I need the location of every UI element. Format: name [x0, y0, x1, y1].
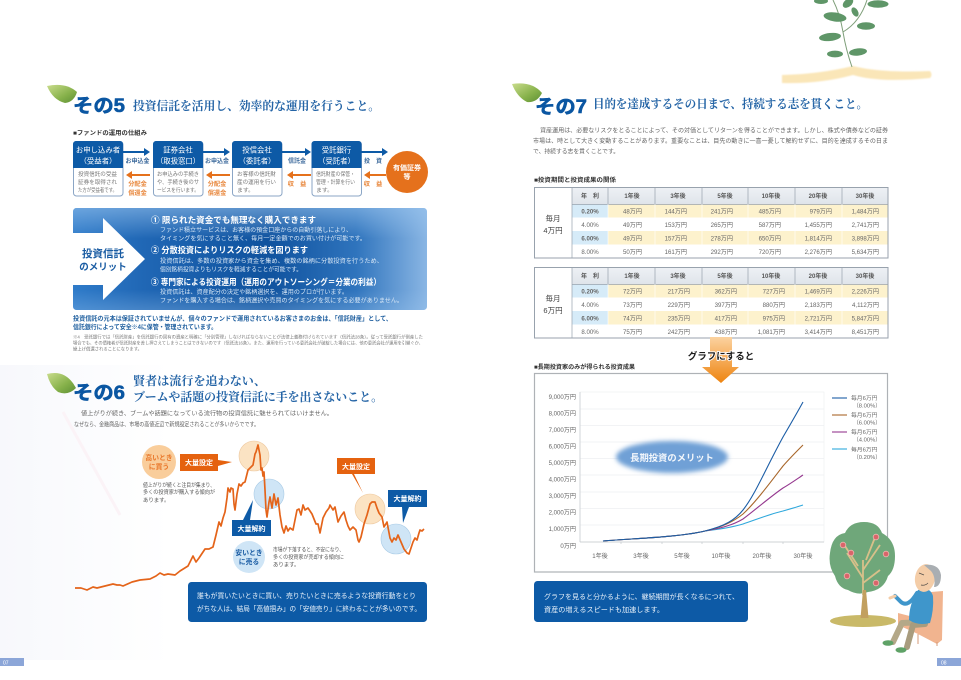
legend: 毎月6万円 [851, 446, 878, 454]
illustration: seedling plant [782, 0, 932, 83]
table: monthly 40,000 yen: 0.20% [581, 208, 599, 216]
x axis labels [592, 552, 812, 560]
arrow labels: 分配金 [128, 180, 148, 188]
text: rising market: 値上がりが続くと注目が集まり、 [143, 481, 215, 489]
arrow: merit label: のメリット [79, 262, 127, 273]
table: monthly 60,000 yen: 6.00% [581, 316, 599, 322]
table: monthly 60,000 yen: 5年後 [717, 272, 733, 280]
table: monthly 60,000 yen: 75万円 [623, 329, 642, 336]
heading: その6: 賢者は流行を追わない、 [133, 373, 266, 388]
orange price line [75, 445, 424, 590]
tag: large issuance left: 大量設定 [185, 458, 213, 467]
merit 2: ② 分散投資によりリスクの軽減を図ります [151, 244, 308, 255]
arrow: to graph: グラフにすると [688, 350, 754, 362]
x axis labels: 20年後 [753, 552, 771, 560]
arrow labels: 収 益 [288, 180, 307, 188]
merit 3: ファンドを購入する場合は、銘柄選択や売買のタイミングを気にする必要がありません。 [160, 296, 403, 304]
table: monthly 40,000 yen: 30年後 [856, 192, 874, 200]
table: monthly 60,000 yen: 362万円 [715, 288, 737, 296]
text: section 6 intro [74, 410, 333, 428]
table: monthly 60,000 yen: 毎月 [546, 293, 560, 303]
y axis labels: 8,000万円 [549, 410, 576, 418]
text: section 7 intro: で、持続する志を貫くことです。 [533, 148, 619, 156]
heading: その5: その5 [73, 96, 125, 117]
table: monthly 40,000 yen: 6.00% [581, 236, 599, 242]
table: monthly 60,000 yen: 217万円 [668, 288, 690, 296]
callout: high buying low selling: 誰もが買いたいときに買い、売りたいときに売るような投資行動をとり [197, 591, 416, 600]
heading: その7: 目的を達成するその日まで、持続する志を貫くこと。 [593, 96, 868, 111]
y axis labels: 6,000万円 [549, 444, 576, 450]
box: investment trust company: （委託者） [239, 156, 275, 166]
callout: buy when high: に買う [149, 462, 169, 471]
table: monthly 40,000 yen: 485万円 [759, 208, 781, 216]
table: monthly 40,000 yen: 161万円 [665, 249, 687, 256]
table: monthly 40,000 yen: 241万円 [711, 208, 733, 216]
box: applicant: 投資信託の受益 [78, 170, 118, 178]
legend: （6.00%） [853, 420, 881, 426]
table: monthly 40,000 yen: 48万円 [623, 208, 642, 216]
text: falling market: あります。 [273, 562, 299, 568]
tag: large issuance right [337, 458, 375, 493]
arrow labels [125, 157, 383, 197]
text: rising market: 多くの投資家が購入する傾向が [143, 488, 216, 496]
table: monthly 40,000 yen: 2,276万円 [805, 249, 832, 256]
callout: sell when low: に売る [239, 557, 259, 566]
table: monthly 40,000 yen: 5年後 [717, 192, 733, 200]
table: monthly 60,000 yen: 74万円 [623, 316, 642, 322]
heading: その7 [512, 83, 868, 118]
table: monthly 60,000 yen: 0.20% [581, 288, 599, 296]
legend: 毎月6万円 [851, 411, 878, 419]
merit 3: 投資信託は、資産配分の決定や銘柄選択を、運用のプロが行います。 [160, 288, 348, 296]
box: trust bank: 管理・計算を行い [316, 178, 355, 186]
table: monthly 40,000 yen [534, 187, 888, 258]
merit 2: 投資信託は、多数の投資家から資金を集め、複数の銘柄に分散投資を行うため、 [160, 257, 383, 265]
text: rising market: あります。 [143, 497, 169, 504]
table: monthly 60,000 yen: 8.00% [581, 329, 599, 336]
heading: その5 [47, 85, 380, 117]
box: securities company [153, 141, 203, 196]
curve: 8.00% [603, 402, 803, 541]
box: applicant: お申し込み者 [76, 146, 120, 154]
table: monthly 60,000 yen: 2,226万円 [852, 288, 879, 296]
footnote [73, 334, 423, 352]
footnote: 場合でも、その債権者が信託財産を差し押さえてしまうことはできないのです（信託法16条）。また、運用を行っている委託会社が破綻した場合には、他の委託会社が運用を引継ぐか、 [73, 340, 423, 346]
text: trust property note: 投資信託の元本は保証されていませんが、個々のファンドで運用されているお客さまのお金は、「信託財産」として、 [73, 314, 392, 322]
arrows: investment flow [123, 148, 388, 156]
table: monthly 60,000 yen: 880万円 [763, 302, 785, 309]
chart: price line with callouts [75, 441, 427, 590]
table: monthly 60,000 yen: 975万円 [763, 316, 785, 322]
table: monthly 40,000 yen: 1,455万円 [805, 222, 832, 229]
arrow: merit label [73, 218, 145, 300]
y axis labels: 7,000万円 [549, 427, 576, 434]
arrow labels: 収 益 [364, 180, 383, 188]
callout: buy when high: 高いとき [145, 453, 173, 462]
table: monthly 40,000 yen: 292万円 [711, 249, 733, 256]
table: monthly 60,000 yen: 5,847万円 [852, 316, 879, 322]
box: applicant [73, 141, 123, 196]
callout: chart conclusion: グラフを見ると分かるように、継続期間が長くなるにつれて、 [544, 592, 739, 601]
table: monthly 60,000 yen: 72万円 [623, 288, 642, 296]
merit 3 [151, 276, 403, 304]
arrows: return flow [126, 171, 386, 179]
box: securities company: 証券会社 [163, 146, 193, 154]
table: monthly 60,000 yen: 727万円 [763, 288, 785, 296]
text: section 7 intro: 市場は、時として大きく変動することがあります。重要なことは、目先の動きに一喜一憂して解約せずに、目的を達成するその日ま [533, 137, 888, 145]
table: monthly 40,000 yen: 157万円 [665, 236, 687, 242]
table: monthly 60,000 yen: 73万円 [623, 302, 642, 309]
table: monthly 40,000 yen: 1,814万円 [805, 236, 832, 242]
y axis labels: 3,000万円 [549, 493, 576, 500]
y axis labels: 9,000万円 [549, 394, 576, 401]
table: monthly 40,000 yen: 3年後 [670, 192, 686, 200]
table: monthly 60,000 yen: 4.00% [581, 302, 599, 309]
illustration: apple tree [830, 522, 896, 627]
table: monthly 60,000 yen: 1,081万円 [758, 329, 785, 336]
table: monthly 40,000 yen: 毎月 [546, 213, 560, 223]
arrow labels: 分配金 [208, 180, 227, 188]
illustration: elderly man in chair [882, 562, 943, 653]
y axis labels: 1,000万円 [549, 526, 576, 533]
merit 1: タイミングを気にすること無く、毎月一定金額でのお買い付けが可能です。 [160, 234, 366, 242]
curve: 4.00% [603, 475, 803, 541]
y axis labels: 0万円 [560, 543, 576, 550]
legend: 毎月6万円 [851, 394, 878, 402]
merit 2: 個別銘柄投資よりもリスクを軽減することが可能です。 [160, 266, 302, 274]
box: applicant: （受益者） [80, 156, 116, 166]
table: monthly 60,000 yen: 3,414万円 [805, 329, 832, 336]
text: trust property note [73, 314, 392, 331]
circle: securities [386, 151, 428, 193]
callout: chart conclusion: 資産の増えるスピードも加速します。 [544, 605, 664, 614]
table: monthly 60,000 yen: 30年後 [856, 272, 874, 280]
table: monthly 60,000 yen: 397万円 [715, 302, 737, 309]
table: monthly 40,000 yen: 10年後 [762, 192, 780, 200]
panel: line chart [534, 374, 888, 572]
table: monthly 40,000 yen: 3,898万円 [852, 236, 879, 242]
table: monthly 40,000 yen: 144万円 [665, 208, 687, 216]
arrow: merit label: 投資信託 [82, 247, 124, 260]
box: investment trust company: 投信会社 [242, 146, 272, 154]
callout: high buying low selling: がちな人は、結局「高値掴み」の「安値売り」に終わることが多いのです。 [197, 604, 421, 613]
text: section 6 intro: なぜなら、金融商品は、市場の高値近辺で新規設定されることが多いからでです。 [74, 420, 259, 428]
box: trust bank [312, 141, 362, 196]
text: falling market: 多くの投資家が売却する傾向に [273, 553, 344, 561]
table: monthly 60,000 yen: 242万円 [668, 329, 690, 336]
box: trust bank: ます。 [316, 187, 333, 194]
table: monthly 60,000 yen: 8,451万円 [852, 329, 879, 336]
box: securities company: お申込みの手続き [157, 170, 199, 178]
table: monthly 40,000 yen: 1年後 [624, 192, 640, 200]
table: monthly 60,000 yen [534, 267, 888, 338]
table: monthly 40,000 yen: 720万円 [759, 249, 781, 256]
badge: long-term merit [616, 441, 728, 473]
tag: large issuance right: 大量設定 [342, 462, 370, 471]
table: monthly 40,000 yen: 49万円 [623, 222, 642, 229]
table: monthly 60,000 yen: 417万円 [715, 316, 737, 322]
text: trust property note: 信託銀行によって安全※4に保管・管理されています。 [73, 322, 217, 331]
label: period and result: ■投資期間と投資成果の関係 [534, 176, 616, 184]
table: monthly 60,000 yen: 6万円 [543, 306, 563, 315]
box: investment trust company: 産の運用を行い [237, 178, 276, 186]
box: investment trust company [232, 141, 282, 196]
page background tint [0, 365, 170, 660]
highlight circles [239, 441, 411, 554]
table: monthly 60,000 yen: 229万円 [668, 302, 690, 309]
footnote: ※4 受託銀行では「信託財産」を信託銀行の固有の資産と明確に「分別管理」しなければならないことが法律上義務付けられています（信託法28条）。従って受託銀行が倒産した [73, 334, 423, 340]
table: monthly 40,000 yen: 979万円 [810, 208, 832, 216]
footnote: 繰上げ償還されることになります。 [73, 346, 142, 352]
x axis labels: 30年後 [794, 552, 812, 560]
table: monthly 40,000 yen: 5,634万円 [852, 249, 879, 256]
merit 1: ① 限られた資金でも無理なく購入できます [151, 214, 316, 225]
table: monthly 40,000 yen: 2,741万円 [852, 222, 879, 229]
tag: large redemption left: 大量解約 [238, 524, 266, 533]
table: monthly 60,000 yen: 10年後 [762, 272, 780, 280]
arrow labels: お申込金 [205, 157, 229, 165]
page number 07: 07 [3, 660, 9, 666]
x axis labels: 3年後 [633, 552, 649, 560]
arrow labels: 投 資 [364, 157, 382, 165]
table: monthly 40,000 yen: 4.00% [581, 222, 599, 229]
table: monthly 60,000 yen: 4,112万円 [852, 302, 879, 309]
table: monthly 60,000 yen: 438万円 [715, 329, 737, 336]
table: monthly 40,000 yen: 587万円 [759, 222, 781, 229]
box: securities company: （取扱窓口） [156, 156, 200, 166]
heading: その6 [47, 373, 383, 404]
y axis labels: 2,000万円 [549, 510, 576, 516]
box: applicant: た方が受益者です。 [78, 186, 117, 194]
box: investment trust company: お客様の信託財 [237, 170, 277, 178]
legend [832, 394, 881, 461]
arrow labels: 償還金 [128, 189, 148, 197]
heading: その7: その7 [535, 97, 587, 118]
heading: その6: ブームや話題の投資信託に手を出さないこと。 [133, 389, 383, 404]
table: monthly 40,000 yen: 8.00% [581, 249, 599, 256]
callout: sell when low: 安いとき [235, 548, 263, 557]
legend: （8.00%） [853, 402, 881, 410]
circle: securities: 等 [404, 172, 410, 181]
box: trust bank: （受託者） [318, 156, 355, 166]
merit 1 [151, 214, 366, 242]
page number 08: 08 [941, 660, 947, 666]
merit 3: ③ 専門家による投資運用（運用のアウトソーシング＝分業の利益） [151, 276, 381, 287]
box: trust bank: 信託財産の保管・ [316, 170, 355, 178]
table: monthly 60,000 yen: 20年後 [809, 272, 827, 280]
arrow labels: 償還金 [208, 189, 227, 197]
merit 2 [151, 244, 383, 274]
label: fund mechanism: ■ファンドの運用の仕組み [73, 129, 147, 137]
arrow labels: 信託金 [288, 157, 306, 165]
tag: large redemption right [388, 490, 427, 523]
table: monthly 40,000 yen: 20年後 [809, 192, 827, 200]
callout: sell when low [233, 541, 265, 573]
arrow: to graph [688, 337, 754, 383]
table: monthly 40,000 yen: 278万円 [711, 236, 733, 242]
callout: chart conclusion [534, 581, 748, 622]
table: monthly 60,000 yen: 年 利 [581, 272, 599, 280]
table: monthly 40,000 yen: 1,484万円 [852, 208, 879, 216]
box: applicant: 証券を取得され [78, 178, 118, 186]
circle: securities: 有価証券 [393, 163, 421, 172]
text: falling market [273, 546, 344, 568]
text: rising market [143, 481, 216, 504]
table: monthly 40,000 yen: 年 利 [581, 192, 599, 200]
legend: （0.20%） [853, 454, 881, 461]
arrow labels: お申込金 [125, 157, 150, 165]
y axis labels: 4,000万円 [549, 476, 576, 484]
table: monthly 40,000 yen: 650万円 [759, 236, 781, 242]
page number 07 [0, 658, 24, 666]
table: monthly 40,000 yen: 50万円 [623, 249, 642, 256]
text: section 6 intro: 値上がりが続き、ブームや話題になっている流行物の投資信託に魅せられてはいけません。 [81, 410, 333, 418]
text: section 7 intro: 資産運用は、必要なリスクをとることによって、その対価としてリターンを得ることができます。しかし、株式や債券などの証券 [540, 126, 888, 134]
legend: （4.00%） [853, 436, 881, 444]
heading: その6: その6 [73, 383, 125, 404]
y axis labels [549, 394, 576, 550]
badge: long-term merit: 長期投資のメリット [630, 452, 714, 463]
table: monthly 60,000 yen: 1年後 [624, 272, 640, 280]
curve: 6.00% [603, 445, 803, 541]
y axis labels: 5,000万円 [549, 460, 576, 467]
x axis labels: 10年後 [712, 552, 730, 560]
label: long-term results: ■長期投資家のみが得られる投資成果 [534, 363, 635, 371]
heading: その5: 投資信託を活用し、効率的な運用を行うこと。 [133, 98, 380, 113]
x axis labels: 1年後 [592, 552, 608, 560]
legend: 毎月6万円 [851, 428, 878, 436]
x axis labels: 5年後 [674, 552, 690, 560]
table: monthly 40,000 yen: 153万円 [665, 222, 687, 229]
curve: 0.20% [603, 505, 803, 541]
page number 08 [937, 658, 961, 666]
tag: large redemption right: 大量解約 [394, 494, 422, 503]
table: monthly 60,000 yen: 3年後 [670, 272, 686, 280]
table: monthly 60,000 yen: 1,469万円 [805, 288, 832, 296]
tag: large issuance left [180, 454, 232, 471]
table: monthly 60,000 yen: 235万円 [668, 316, 690, 322]
tag: large redemption left [232, 500, 271, 536]
box: securities company: や、手続き後のサ [157, 178, 199, 186]
text: section 7 intro [533, 126, 888, 156]
box: investment trust company: ます。 [237, 187, 254, 194]
box: securities company: ービスを行います。 [157, 186, 199, 194]
table: monthly 40,000 yen: 265万円 [711, 222, 733, 229]
table: monthly 60,000 yen: 2,183万円 [805, 302, 832, 309]
merit 1: ファンド積立サービスは、お客様の預金口座からの自動引落しにより、 [160, 226, 352, 234]
callout: buy when high [142, 445, 176, 479]
flow diagram: fund mechanism [73, 141, 428, 197]
table: monthly 60,000 yen: 2,721万円 [805, 316, 832, 322]
table: monthly 40,000 yen: 4万円 [543, 226, 563, 235]
box: trust bank: 受託銀行 [322, 146, 352, 154]
callout: high buying low selling [188, 582, 427, 622]
text: falling market: 市場が下落すると、不安になり、 [273, 546, 344, 554]
table: monthly 40,000 yen: 49万円 [623, 236, 642, 242]
panel: merits of investment trusts [73, 208, 427, 310]
